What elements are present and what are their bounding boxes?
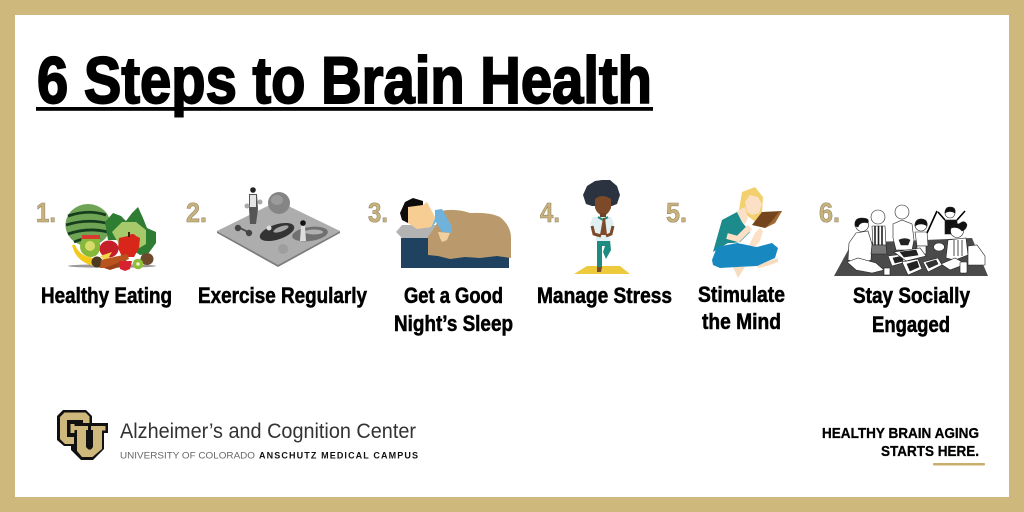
icon: person sleeping in bed — [396, 198, 511, 268]
label: Stay Socially Engaged — [853, 283, 971, 337]
panel: step 6 stay socially engaged — [819, 197, 988, 337]
icon: woman reading a book — [712, 187, 782, 278]
label: Exercise Regularly: Exercise Regularly — [198, 283, 368, 308]
number 5: 5. — [666, 197, 687, 228]
title: 6 Steps to Brain Health — [37, 43, 652, 117]
number 6: 6. — [819, 197, 840, 228]
number 4: 4. — [540, 197, 560, 228]
logo: interlocking CU mark — [57, 410, 108, 460]
label: Get a Good Night's Sleep: Get a Good — [404, 283, 503, 308]
label: Stay Socially Engaged: Engaged — [872, 312, 950, 337]
label: Get a Good Night's Sleep: Night’s Sleep — [394, 311, 513, 336]
label: Manage Stress: Manage Stress — [537, 283, 672, 308]
text block: center name: Alzheimer’s and Cognition Center — [120, 420, 416, 443]
text block: center name — [120, 420, 418, 460]
icon: woman in yoga tree pose — [574, 180, 630, 274]
panel: step 1 healthy eating — [36, 197, 172, 308]
panel: step 5 stimulate the mind — [666, 187, 785, 334]
text block: center name: UNIVERSITY OF COLORADO — [120, 450, 255, 460]
label: Healthy Eating: Healthy Eating — [41, 283, 172, 308]
icon: gym floor with people exercising — [217, 187, 340, 267]
tagline: STARTS HERE. — [881, 443, 979, 460]
number 2: 2. — [186, 197, 207, 228]
label: Stimulate the Mind: Stimulate — [698, 282, 785, 307]
icon: fruit and vegetables — [66, 204, 156, 271]
label: Get a Good Night's Sleep — [394, 283, 513, 336]
number 1: 1. — [36, 197, 56, 228]
label: Stimulate the Mind — [698, 282, 785, 334]
icon: family picnic — [834, 205, 988, 276]
tagline: HEALTHY BRAIN AGING — [822, 425, 979, 442]
panel: step 3 get a good night's sleep — [368, 197, 513, 336]
label: Stimulate the Mind: the Mind — [702, 309, 781, 334]
tagline — [822, 425, 985, 466]
text block: center name: ANSCHUTZ MEDICAL CAMPUS — [259, 450, 418, 460]
number 3: 3. — [368, 197, 388, 228]
label: Stay Socially Engaged: Stay Socially — [853, 283, 971, 308]
panel: step 2 exercise regularly — [186, 187, 368, 308]
panel: step 4 manage stress — [537, 180, 672, 308]
